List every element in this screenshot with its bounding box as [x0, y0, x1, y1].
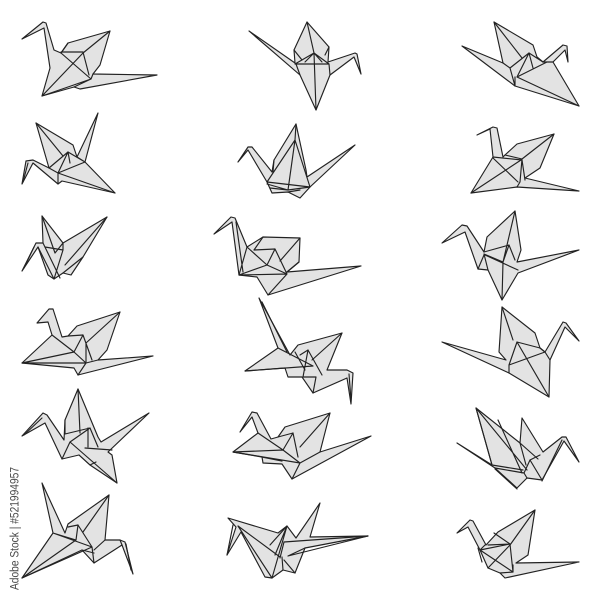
crane row 1 left [22, 22, 157, 96]
crane row 4 right [442, 307, 579, 397]
crane row 3 right [442, 211, 579, 300]
crane row 2 right [471, 127, 579, 193]
crane row 1 right [462, 22, 579, 106]
crane row 6 centre [227, 503, 368, 578]
crane row 3 left [22, 216, 107, 279]
crane row 5 centre [233, 412, 371, 479]
crane row 2 centre [238, 124, 355, 198]
crane row 1 centre [249, 22, 361, 110]
crane row 6 left [22, 483, 133, 578]
stock id caption: Adobe Stock | #521994957 [10, 467, 22, 590]
crane row 5 right [457, 408, 579, 489]
crane row 4 left [22, 309, 153, 375]
crane row 2 left [22, 113, 115, 193]
crane row 5 left [22, 389, 149, 483]
crane row 6 right [457, 510, 579, 578]
crane row 4 centre [245, 298, 353, 404]
crane row 3 centre [214, 217, 361, 295]
